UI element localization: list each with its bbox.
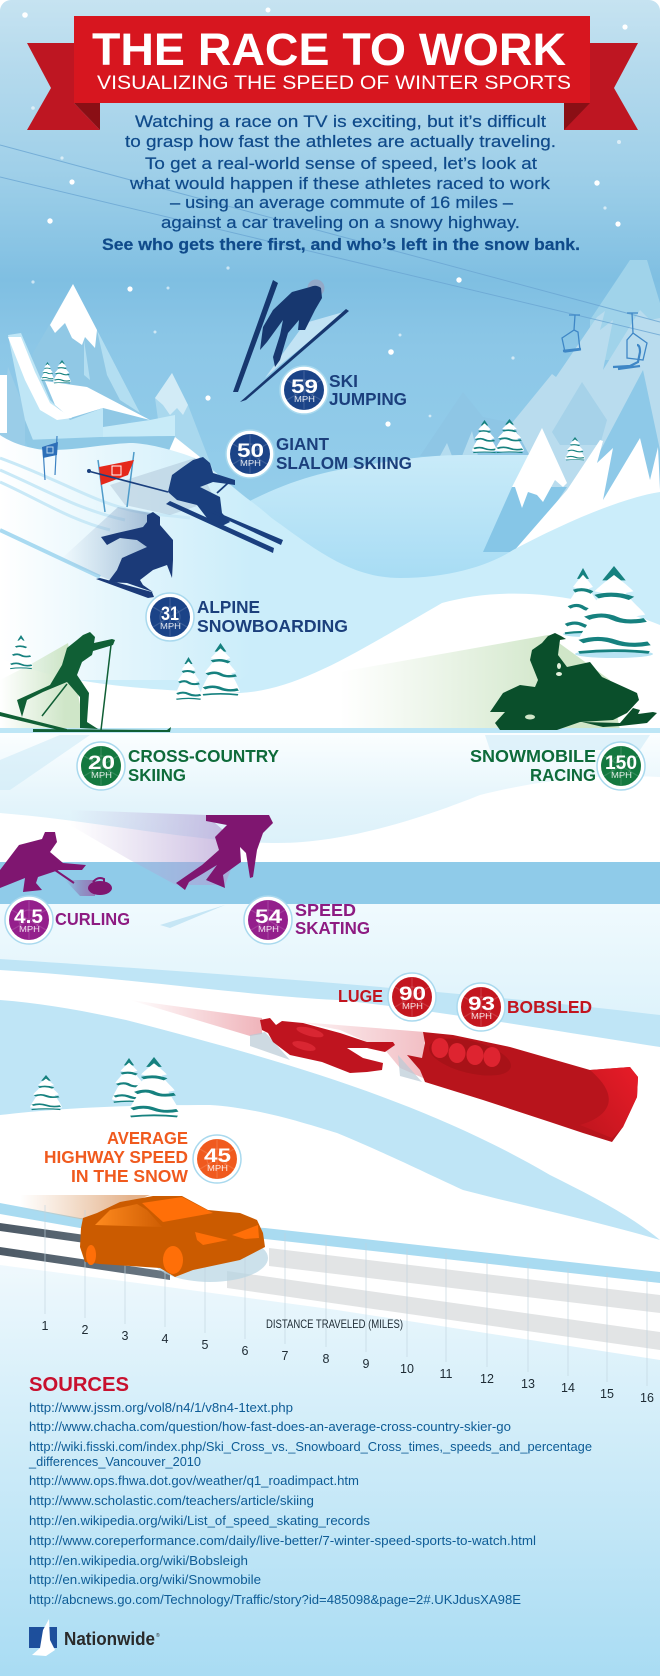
label: ski jumping: JUMPING [329, 389, 407, 409]
badge: luge 90 mph: 90 [399, 984, 426, 1005]
bobsled track band [0, 959, 660, 1260]
right snowy peaks [483, 428, 660, 552]
intro paragraph: against a car traveling on a snowy highway. [161, 214, 520, 232]
axis title: DISTANCE TRAVELED (MILES) [266, 1317, 403, 1331]
chair with skier [613, 313, 647, 369]
badge: snowmobile 150 mph [597, 742, 645, 790]
badge: snowmobile 150 mph: MPH [611, 770, 632, 780]
banner panel [74, 16, 590, 103]
mile labels: 13 [521, 1377, 535, 1391]
badge: alpine snowboarding 31 mph [146, 593, 194, 641]
small distant mountain [155, 373, 255, 505]
label: cross-country skiing [128, 746, 279, 785]
badge: giant slalom 50 mph: MPH [240, 458, 261, 468]
label: giant slalom skiing: SLALOM SKIING [276, 453, 412, 473]
sky [0, 0, 660, 560]
badge: curling 4.5 mph: 4.5 [14, 907, 43, 928]
landing mound [45, 381, 150, 420]
giant slalom skier [87, 457, 283, 553]
bobsled white strip [0, 970, 660, 1240]
cross-country skier [0, 632, 171, 732]
lower hill [0, 1105, 660, 1360]
mile labels: 8 [323, 1352, 330, 1366]
intro paragraph: what would happen if these athletes raced to work [129, 175, 551, 193]
foreground hill [0, 440, 660, 740]
label: bobsled: BOBSLED [507, 997, 592, 1017]
road grey stripes [227, 1248, 660, 1350]
sources list: http://en.wikipedia.org/wiki/Snowmobile [29, 1573, 261, 1587]
helmet [308, 280, 324, 296]
speed trail behind snowboarder [60, 507, 170, 580]
badge: snowmobile 150 mph: 150 [605, 753, 637, 774]
sources list: _differences_Vancouver_2010 [28, 1455, 201, 1469]
ice band [0, 862, 660, 904]
badge: bobsled 93 mph: MPH [471, 1011, 492, 1021]
ski jump ramp [0, 333, 175, 452]
speed trail behind skier [110, 458, 215, 515]
platform [103, 415, 175, 437]
badge: cross-country 20 mph [77, 742, 125, 790]
tall trees right [563, 566, 653, 658]
mile labels [42, 1319, 654, 1405]
left mountain with snow cap [20, 284, 140, 445]
label: average highway speed in the snow: IN THE SNOW [71, 1166, 188, 1186]
title: THE RACE TO WORK [92, 24, 567, 75]
badge: cross-country 20 mph: MPH [91, 770, 112, 780]
badge: speed skating 54 mph: MPH [258, 924, 279, 934]
trail behind snowmobile [340, 635, 620, 730]
small peaks at the horizon [440, 431, 478, 456]
bobsled [407, 1031, 638, 1142]
ramp side [8, 333, 103, 445]
red gate [98, 452, 134, 512]
label: alpine snowboarding: SNOWBOARDING [197, 616, 348, 636]
badge: luge 90 mph [388, 973, 436, 1021]
badge: giant slalom 50 mph: 50 [237, 441, 264, 462]
sources list: http://abcnews.go.com/Technology/Traffic/story?id=485098&page=2#.UKJdusXA98E [29, 1593, 521, 1607]
hill pool [248, 455, 540, 620]
landing slope [168, 437, 200, 470]
lower snow [0, 733, 660, 868]
mile labels: 10 [400, 1362, 414, 1376]
Nationwide logo [29, 1619, 160, 1656]
intro paragraph: To get a real-world sense of speed, let’s look at [145, 155, 537, 173]
label: speed skating: SKATING [295, 918, 370, 938]
badge: bobsled 93 mph [457, 983, 505, 1031]
first white peak [512, 428, 567, 508]
mile labels: 4 [162, 1332, 169, 1346]
mile labels: 15 [600, 1387, 614, 1401]
red speed trails [130, 1000, 425, 1082]
snowflakes [22, 8, 628, 427]
mile labels: 14 [561, 1381, 575, 1395]
road blue stripe [0, 1203, 660, 1283]
reflection of cross-country skier [0, 735, 90, 790]
car [80, 1196, 265, 1277]
ramp legs [0, 367, 25, 447]
blue gate [42, 436, 58, 480]
intro paragraph: See who gets there first, and who’s left in the snow bank. [102, 236, 580, 254]
badge: ski jumping 59 mph: MPH [294, 394, 315, 404]
curling athlete [0, 832, 86, 892]
registered mark: ® [156, 1632, 160, 1639]
logo mark [29, 1619, 57, 1656]
skate reflection [160, 905, 225, 928]
label: alpine snowboarding [197, 597, 348, 636]
top-right pale mountain [590, 260, 660, 360]
car speed trail [20, 1195, 150, 1220]
badge: speed skating 54 mph: 54 [255, 907, 283, 928]
badge: alpine snowboarding 31 mph: 31 [161, 604, 179, 625]
badge: ski jumping 59 mph: 59 [291, 377, 318, 398]
snow lower edge [0, 1265, 660, 1676]
sources list: http://www.chacha.com/question/how-fast-does-an-average-cross-country-skier-go [29, 1420, 511, 1434]
sources heading: SOURCES [29, 1374, 129, 1396]
label: curling: CURLING [55, 909, 130, 929]
intro paragraph: – using an average commute of 16 miles – [170, 194, 514, 212]
mile labels: 1 [42, 1319, 49, 1333]
right ski [240, 309, 349, 402]
sources list: http://www.ops.fhwa.dot.gov/weather/q1_roadimpact.htm [29, 1474, 359, 1488]
badge: speed skating 54 mph [244, 896, 292, 944]
sources list: http://www.coreperformance.com/daily/live-better/7-winter-speed-sports-to-watch.html [29, 1534, 536, 1548]
badge: curling 4.5 mph [5, 896, 53, 944]
label: cross-country skiing: CROSS-COUNTRY [128, 746, 279, 766]
small trees on left hill [41, 360, 71, 383]
ribbon folds [74, 103, 590, 130]
label: snowmobile racing: RACING [530, 765, 596, 785]
label: alpine snowboarding: ALPINE [197, 597, 260, 617]
label: speed skating: SPEED [295, 900, 356, 920]
intro paragraph: to grasp how fast the athletes are actually traveling. [125, 133, 556, 151]
badge: bobsled 93 mph: 93 [468, 994, 495, 1015]
mile labels: 12 [480, 1372, 494, 1386]
trail behind cross-country skier [0, 643, 85, 730]
base shadow [25, 436, 175, 452]
label: speed skating [295, 900, 370, 938]
label: cross-country skiing: SKIING [128, 765, 186, 785]
intro paragraph [102, 113, 580, 254]
badge: curling 4.5 mph: MPH [19, 924, 40, 934]
speed skater [176, 815, 273, 890]
lower ice snow [0, 904, 660, 1204]
sources list: http://www.jssm.org/vol8/n4/1/v8n4-1text.php [29, 1401, 293, 1415]
white hill [0, 594, 660, 735]
empty chair [562, 315, 581, 352]
ski lift chairs [562, 313, 647, 369]
curling stone [88, 878, 112, 895]
white ridge [513, 438, 660, 552]
badge: cross-country 20 mph: 20 [88, 753, 115, 774]
snowboarder [96, 512, 173, 598]
badge: highway 45 mph [193, 1135, 241, 1183]
label: average highway speed in the snow [44, 1128, 188, 1186]
label: snowmobile racing: SNOWMOBILE [470, 746, 596, 766]
left tower [0, 375, 7, 433]
right pale mountains [512, 310, 660, 520]
snowmobile [490, 633, 657, 730]
badge: ski jumping 59 mph [280, 366, 328, 414]
mile labels: 9 [363, 1357, 370, 1371]
left ski [233, 280, 278, 392]
ski jumper [233, 280, 349, 402]
subtitle: VISUALIZING THE SPEED OF WINTER SPORTS [97, 73, 571, 94]
right ribbon tail [564, 43, 638, 130]
logo wordmark: Nationwide [64, 1629, 155, 1649]
trees behind hill [472, 419, 585, 460]
distance axis ticks [45, 1205, 647, 1386]
sources list: http://en.wikipedia.org/wiki/List_of_speed_skating_records [29, 1514, 370, 1528]
label: average highway speed in the snow: HIGHWAY SPEED [44, 1147, 188, 1167]
label: luge: LUGE [338, 986, 383, 1006]
left ribbon tail [27, 43, 100, 130]
slalom hill [0, 435, 340, 680]
badge: alpine snowboarding 31 mph: MPH [160, 621, 181, 631]
sources list: http://en.wikipedia.org/wiki/Bobsleigh [29, 1554, 248, 1568]
white swoosh [0, 776, 660, 880]
label: ski jumping: SKI [329, 371, 358, 391]
distant left-of-trees mountains [420, 392, 530, 456]
badge: highway 45 mph: 45 [204, 1146, 232, 1167]
ramp surface [8, 337, 72, 420]
ski lift cables [0, 145, 660, 335]
mile labels: 11 [440, 1367, 453, 1381]
banner [27, 16, 638, 130]
pale sweep under ski jumper [265, 311, 347, 378]
right blue mountain [590, 370, 660, 520]
dark road stripes [0, 1223, 170, 1280]
label: giant slalom skiing [276, 434, 412, 473]
snowmobile reflection [485, 735, 650, 750]
curling stone trail [65, 880, 95, 896]
sources list [28, 1401, 592, 1607]
label: snowmobile racing [470, 746, 596, 785]
mile labels: 6 [242, 1344, 249, 1358]
intro paragraph: Watching a race on TV is exciting, but it’s difficult [135, 113, 546, 131]
mile labels: 7 [282, 1349, 289, 1363]
speed skater trail [70, 810, 240, 885]
badge: luge 90 mph: MPH [402, 1001, 423, 1011]
car shadow [152, 1234, 268, 1282]
badge: giant slalom 50 mph [226, 430, 274, 478]
slalom flags [42, 436, 215, 515]
mile labels: 16 [640, 1391, 654, 1405]
label: giant slalom skiing: GIANT [276, 434, 329, 454]
trees beside the skier [9, 635, 240, 699]
ground strip [0, 728, 660, 733]
right mid mountain [552, 382, 607, 445]
mile labels: 5 [202, 1338, 209, 1352]
base of first peak [483, 487, 567, 552]
mile labels: 2 [82, 1323, 89, 1337]
mile labels: 3 [122, 1329, 129, 1343]
badge: highway 45 mph: MPH [207, 1163, 228, 1173]
bottom trees [30, 1057, 180, 1117]
body [260, 286, 322, 367]
luge athlete [260, 1018, 395, 1073]
label: ski jumping [329, 371, 407, 409]
label: average highway speed in the snow: AVERAGE [107, 1128, 188, 1148]
sources list: http://www.scholastic.com/teachers/article/skiing [29, 1494, 314, 1508]
sources list: http://wiki.fisski.com/index.php/Ski_Cross_vs._Snowboard_Cross_times,_speeds_and_percentage [29, 1440, 592, 1454]
